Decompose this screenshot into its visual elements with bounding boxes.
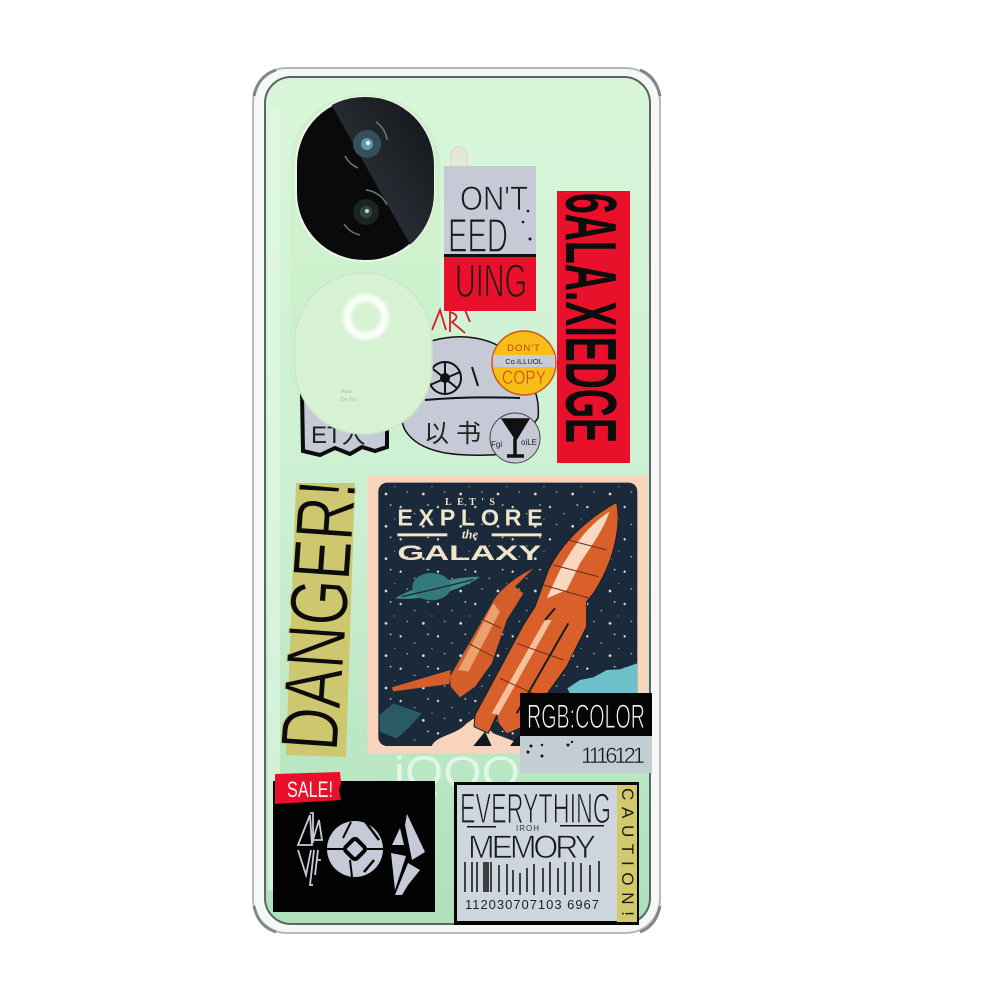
- round badge: don't copy: DON'T: [507, 343, 541, 354]
- small print: Aura: [341, 389, 352, 395]
- sticker: left torn label: ET人: [311, 422, 366, 449]
- shuttle orbiter: [392, 568, 533, 697]
- round badge: cocktail: oiLE: [521, 438, 537, 447]
- sticker: left torn label: [302, 392, 387, 455]
- disc emblem: [327, 820, 383, 877]
- phone case body: [253, 68, 660, 933]
- barcode digits: 112030707103 6967: [465, 897, 599, 912]
- barcode: [465, 861, 599, 895]
- rocket highlight: [547, 512, 609, 598]
- sticker: skull: 以 书: [424, 420, 481, 448]
- sticker: rgb color: 1116121: [581, 743, 645, 768]
- everything from memory text: IROH: [516, 824, 540, 833]
- upper lens: [345, 122, 387, 168]
- engine nozzles: [473, 732, 525, 746]
- poster title: [397, 497, 543, 565]
- round badge: cocktail: Fgi: [491, 440, 502, 449]
- lower lens: [344, 190, 387, 235]
- stars: [380, 484, 636, 744]
- right shard emblem: [391, 814, 425, 895]
- round badge: don't copy: Co.ILLUOL: [505, 357, 543, 366]
- asteroid: [567, 663, 637, 700]
- sticker: danger: DANGER!: [264, 478, 374, 753]
- main rocket: [473, 502, 618, 746]
- phone case infographic: [252, 67, 662, 934]
- exhaust cloud: [432, 717, 527, 746]
- sticker: don't need using: ON'T: [460, 180, 528, 218]
- red scribble: [432, 310, 470, 333]
- sticker: don't need using: [444, 166, 536, 311]
- everything from memory text: EVERYTHING: [460, 785, 611, 833]
- poster title: EXPLORE: [397, 504, 543, 530]
- iQOO watermark: iQOO: [394, 748, 520, 797]
- front oval module: [295, 273, 432, 434]
- camera module: [296, 90, 440, 262]
- sticker: sale: [273, 772, 435, 912]
- sticker: galaxy edge: 6ALA.XIEDGE: [550, 193, 630, 443]
- nebula: [379, 703, 422, 738]
- sale tag: [275, 772, 341, 804]
- round badge: don't copy: [492, 331, 556, 395]
- sticker: everything memory: [454, 782, 639, 925]
- rocket seams: [500, 540, 607, 697]
- light ring: [347, 298, 385, 336]
- sticker: don't need using: EED: [448, 210, 508, 263]
- night sky: [378, 483, 637, 746]
- everything from memory text: [460, 785, 611, 865]
- left glyphs: [298, 813, 322, 885]
- poster title: the: [462, 528, 478, 542]
- sticker: don't need using: UING: [455, 254, 527, 307]
- sticker: rgb color: [520, 693, 652, 773]
- caution strip: CAUTION!: [618, 788, 637, 916]
- sticker: danger: [264, 478, 374, 757]
- round badge: don't copy: COPY: [502, 368, 546, 389]
- poster title: GALAXY: [397, 541, 541, 565]
- poster title: LET'S: [445, 497, 495, 508]
- poster background: [367, 475, 647, 753]
- round badge: cocktail: [490, 413, 540, 463]
- sale tag: SALE!: [287, 777, 333, 802]
- poster: explore the galaxy: [367, 475, 647, 753]
- planet: [395, 573, 480, 600]
- sticker: galaxy edge: [550, 191, 630, 463]
- everything from memory text: MEMORY: [468, 829, 596, 865]
- flash: [451, 147, 467, 185]
- film reel eye: [429, 362, 461, 394]
- front oval module: De Pro: [341, 397, 357, 403]
- sticker: rgb color: RGB:COLOR: [527, 698, 645, 736]
- sticker: skull: [400, 310, 538, 455]
